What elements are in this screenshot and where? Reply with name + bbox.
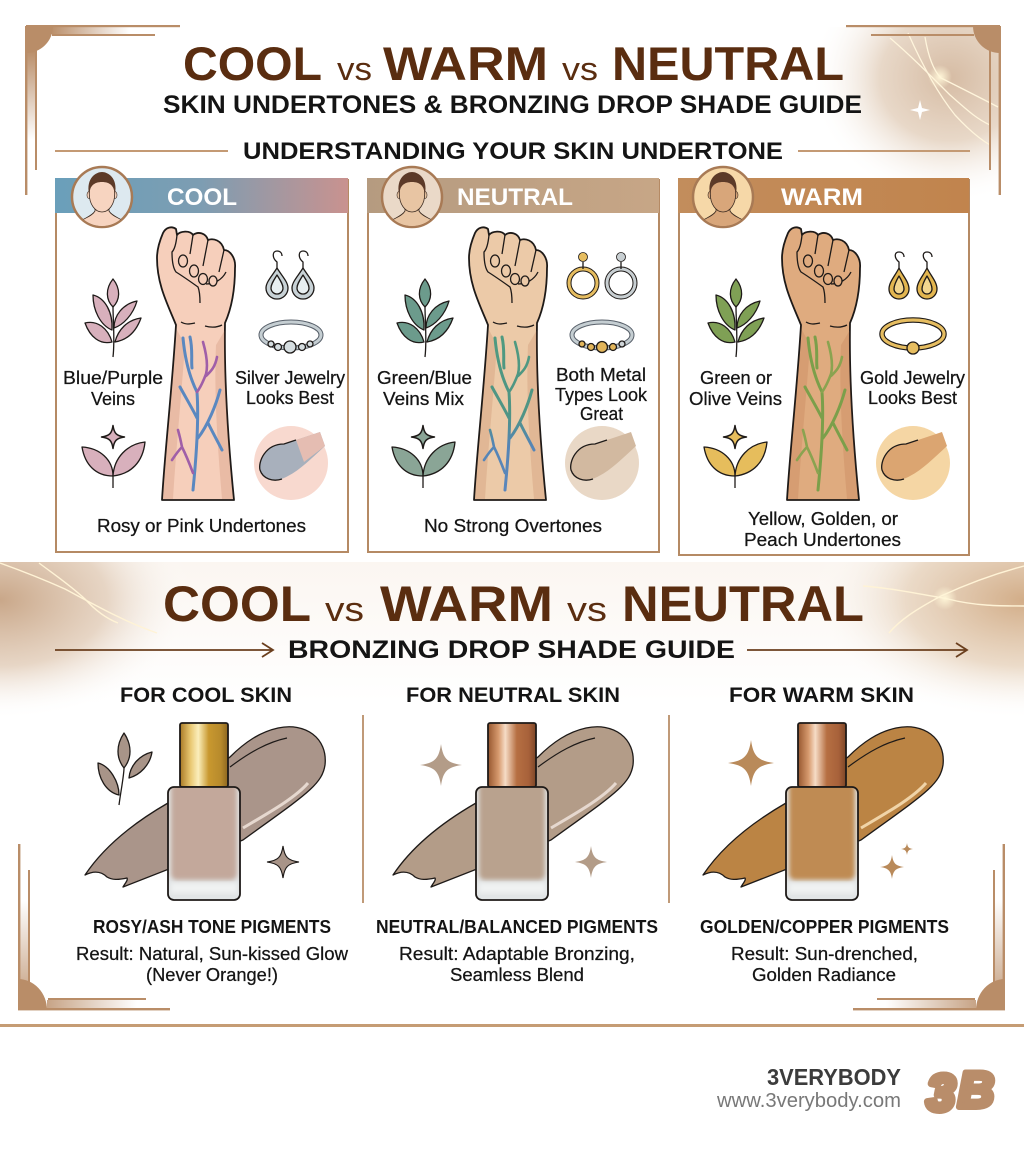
icon: sparkle medium bbox=[880, 855, 904, 879]
warm label: undertones: Yellow, Golden, or bbox=[748, 509, 898, 529]
frame: top left corner bbox=[25, 25, 180, 195]
column headings: FOR NEUTRAL SKIN bbox=[406, 684, 620, 707]
icon: silver earrings bbox=[266, 251, 314, 299]
warm label: jewelry: Gold Jewelry bbox=[860, 368, 965, 388]
panel: warm bbox=[678, 167, 969, 555]
subtitle: SKIN UNDERTONES & BRONZING DROP SHADE GUIDE bbox=[163, 91, 862, 119]
swatch: warm smear bbox=[703, 727, 943, 887]
icon: sparkle small bbox=[575, 846, 607, 878]
icon: cool swatch bbox=[254, 426, 328, 500]
icon: cool arm bbox=[157, 227, 235, 500]
arrow: right bbox=[747, 643, 967, 657]
icon: sparkle bbox=[267, 846, 299, 878]
title: lower: WARM bbox=[380, 576, 553, 632]
icon: neutral face avatar bbox=[382, 167, 442, 227]
icon: neutral swatch bbox=[565, 426, 639, 500]
cool label: undertones: Rosy or Pink Undertones bbox=[97, 516, 306, 536]
product: neutral bbox=[376, 723, 658, 985]
neutral pigment text bbox=[376, 917, 658, 985]
decorative light streaks top bbox=[890, 33, 998, 145]
neutral pigment text: Result: Adaptable Bronzing, bbox=[399, 944, 635, 964]
logo: 3B: 3 bbox=[927, 1065, 955, 1121]
neutral pigment text: NEUTRAL/BALANCED PIGMENTS bbox=[376, 917, 658, 937]
frame: bottom right corner bbox=[853, 844, 1005, 1010]
footer brand: 3VERYBODY bbox=[767, 1064, 901, 1090]
icon: neutral lower leaves bbox=[392, 426, 455, 488]
warm label: veins bbox=[689, 368, 782, 409]
warm label: jewelry bbox=[860, 368, 965, 408]
neutral header: NEUTRAL bbox=[457, 184, 573, 211]
icon: neutral bottle bbox=[476, 723, 548, 900]
frame: top right corner bbox=[846, 25, 1001, 195]
icon: warm bottle bbox=[786, 723, 858, 900]
icon: warm lower leaves bbox=[704, 426, 767, 488]
decorative light streaks band bbox=[0, 563, 1024, 633]
top right glow bbox=[790, 27, 999, 217]
cool label: veins: Blue/Purple bbox=[63, 368, 163, 388]
panel: neutral bbox=[367, 167, 659, 552]
icon: sparkle large bbox=[728, 740, 774, 786]
warm pigment text: GOLDEN/COPPER PIGMENTS bbox=[700, 917, 949, 937]
warm label: veins: Green or bbox=[700, 368, 772, 388]
icon: cool leaves bbox=[98, 733, 152, 805]
warm header bbox=[678, 178, 969, 213]
neutral label: jewelry bbox=[555, 365, 648, 424]
warm label: veins: Olive Veins bbox=[689, 389, 782, 409]
icon: warm swatch bbox=[876, 426, 950, 500]
icon: cool bottle bbox=[168, 723, 240, 900]
frame: bottom left corner bbox=[18, 844, 170, 1010]
neutral header bbox=[367, 178, 659, 213]
column headings: FOR WARM SKIN bbox=[729, 684, 914, 707]
icon: mixed bracelet bbox=[572, 322, 632, 352]
title: NEUTRAL bbox=[612, 37, 844, 90]
icon: silver bracelet bbox=[261, 322, 321, 353]
section heading: shade guide: BRONZING DROP SHADE GUIDE bbox=[288, 636, 735, 664]
icon: cool lower leaves bbox=[82, 426, 145, 488]
warm label: jewelry: Looks Best bbox=[868, 388, 957, 408]
swatch: cool smear bbox=[85, 727, 325, 887]
icon: gold earrings bbox=[889, 252, 937, 299]
icon: cool upper leaves bbox=[85, 279, 141, 357]
warm pigment text bbox=[700, 917, 949, 985]
column headings bbox=[120, 684, 914, 707]
icon: neutral upper leaves bbox=[397, 279, 453, 357]
warm label: undertones: Peach Undertones bbox=[744, 530, 901, 550]
cool header bbox=[55, 178, 348, 213]
cool label: jewelry: Silver Jewelry bbox=[235, 368, 345, 388]
neutral label: veins bbox=[377, 368, 472, 409]
title: vs bbox=[562, 51, 598, 87]
lower band background bbox=[0, 562, 1024, 722]
logo: 3B: B bbox=[958, 1062, 994, 1118]
title: lower: NEUTRAL bbox=[622, 576, 864, 632]
title: WARM bbox=[383, 37, 548, 90]
product: cool bbox=[76, 723, 349, 985]
title: lower: vs bbox=[567, 591, 607, 629]
swatch: neutral smear bbox=[393, 727, 633, 887]
neutral pigment text: Seamless Blend bbox=[450, 965, 584, 985]
title: vs bbox=[337, 51, 372, 87]
neutral label: undertones: No Strong Overtones bbox=[424, 516, 602, 536]
icon: sparkle large bbox=[420, 744, 462, 786]
icon: warm face avatar bbox=[693, 167, 753, 227]
icon: neutral arm bbox=[469, 227, 547, 500]
section heading: understanding: UNDERSTANDING YOUR SKIN UNDERTONE bbox=[243, 138, 783, 165]
neutral label: jewelry: Both Metal bbox=[556, 365, 646, 385]
product: warm bbox=[700, 723, 949, 985]
icon: warm upper leaves bbox=[708, 279, 764, 357]
cool header: COOL bbox=[167, 184, 237, 211]
cool pigment text bbox=[76, 917, 349, 985]
neutral label: jewelry: Types Look bbox=[555, 385, 648, 405]
title: lower bbox=[163, 576, 864, 632]
title: lower: COOL bbox=[163, 576, 311, 632]
warm header: WARM bbox=[781, 184, 863, 211]
cool label: veins: Veins bbox=[91, 389, 135, 409]
cool pigment text: ROSY/ASH TONE PIGMENTS bbox=[93, 917, 331, 937]
cool pigment text: Result: Natural, Sun-kissed Glow bbox=[76, 944, 349, 964]
footer brand bbox=[716, 1064, 901, 1112]
icon: sparkle tiny bbox=[901, 843, 913, 855]
neutral label: veins: Veins Mix bbox=[383, 389, 464, 409]
neutral label: jewelry: Great bbox=[580, 404, 623, 424]
icon: cool face avatar bbox=[72, 167, 132, 227]
icon: warm arm bbox=[782, 227, 860, 500]
warm label: undertones bbox=[744, 509, 901, 550]
title: COOL bbox=[183, 37, 322, 90]
warm pigment text: Golden Radiance bbox=[752, 965, 896, 985]
arrow: left bbox=[55, 643, 273, 657]
icon: mixed metal earrings bbox=[569, 252, 635, 297]
neutral label: veins: Green/Blue bbox=[377, 368, 472, 388]
cool label: veins bbox=[63, 368, 163, 409]
footer brand: www.3verybody.com bbox=[716, 1090, 901, 1112]
panel: cool bbox=[55, 167, 348, 552]
column headings: FOR COOL SKIN bbox=[120, 684, 292, 707]
cool pigment text: (Never Orange!) bbox=[146, 965, 278, 985]
logo: 3B bbox=[927, 1062, 994, 1121]
warm pigment text: Result: Sun-drenched, bbox=[731, 944, 918, 964]
cool label: jewelry bbox=[235, 368, 345, 408]
icon: gold bracelet bbox=[882, 320, 944, 354]
title: lower: vs bbox=[325, 591, 364, 629]
cool label: jewelry: Looks Best bbox=[246, 388, 334, 408]
title bbox=[183, 37, 844, 90]
